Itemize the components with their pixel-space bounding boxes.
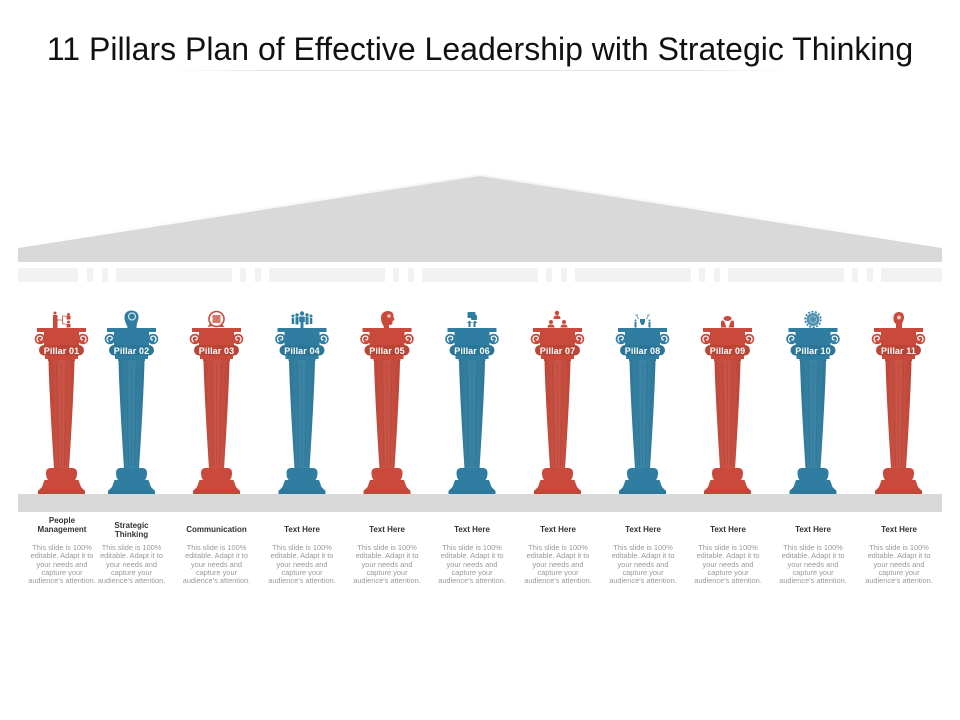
text block 9: Text Here	[710, 525, 746, 534]
text block 8	[609, 525, 677, 585]
pillar 05	[360, 311, 414, 494]
text block 2: your needs and	[106, 560, 157, 569]
text block 8: your needs and	[618, 560, 668, 569]
text block 1: People	[49, 516, 76, 525]
text block 2: audience's attention.	[98, 576, 165, 585]
text block 7: your needs and	[533, 560, 583, 569]
text block 5: audience's attention.	[353, 576, 421, 585]
text block 5: Text Here	[369, 525, 405, 534]
text block 5	[353, 525, 421, 585]
title underline	[170, 70, 790, 71]
text block 7: editable. Adapt it to	[527, 551, 589, 560]
text block 6: This slide is 100%	[442, 543, 502, 552]
text block 11: capture your	[878, 568, 920, 577]
text block 10: This slide is 100%	[783, 543, 843, 552]
text block 10: editable. Adapt it to	[782, 551, 844, 560]
text block 11: This slide is 100%	[869, 543, 929, 552]
text block 1: Management	[38, 525, 87, 534]
pillar 01: Pillar 01	[44, 346, 79, 356]
pillar 09	[701, 316, 754, 494]
text block 7: capture your	[537, 568, 579, 577]
pillar 06	[445, 312, 499, 494]
text block 2: This slide is 100%	[102, 543, 162, 552]
pillar 08: Pillar 08	[625, 346, 660, 356]
pillar 04	[275, 311, 329, 494]
pillar 11	[872, 312, 925, 494]
icon: head with gear	[124, 310, 138, 328]
pillar 10: Pillar 10	[795, 346, 831, 356]
text block 7: audience's attention.	[524, 576, 592, 585]
text block 9: This slide is 100%	[698, 543, 758, 552]
pillar 01	[35, 312, 88, 494]
text block 10	[779, 525, 847, 585]
text block 3: editable. Adapt it to	[185, 551, 248, 560]
text block 4	[268, 525, 336, 585]
text block 9: capture your	[707, 568, 749, 577]
base platform	[18, 494, 942, 512]
text block 3: audience's attention.	[183, 576, 250, 585]
text block 2: Strategic	[114, 521, 149, 530]
text block 3: This slide is 100%	[187, 543, 247, 552]
text block 8: editable. Adapt it to	[612, 551, 674, 560]
text block 1: editable. Adapt it to	[31, 551, 93, 560]
text block 2	[98, 521, 165, 585]
text block 3: Communication	[186, 525, 247, 534]
text block 6: editable. Adapt it to	[441, 551, 503, 560]
pillar 04: Pillar 04	[284, 346, 320, 356]
text block 3: your needs and	[191, 560, 242, 569]
pillar 02	[105, 310, 158, 494]
pillar 06: Pillar 06	[454, 346, 490, 356]
text block 1: audience's attention.	[28, 576, 96, 585]
text block 4: editable. Adapt it to	[271, 551, 333, 560]
text block 6: audience's attention.	[438, 576, 506, 585]
text block 11	[865, 525, 933, 585]
text block 7: This slide is 100%	[528, 543, 588, 552]
text block 4: Text Here	[284, 525, 320, 534]
pillar 05: Pillar 05	[369, 346, 405, 356]
text block 9: audience's attention.	[694, 576, 762, 585]
text block 8: audience's attention.	[609, 576, 677, 585]
pillar 07	[531, 311, 584, 494]
text block 11: your needs and	[874, 560, 924, 569]
text block 9: your needs and	[703, 560, 753, 569]
icon: head with cog	[381, 311, 394, 328]
text block 1	[28, 516, 96, 585]
icon: team of people	[292, 311, 312, 328]
pillar 08	[616, 315, 669, 494]
text block 10: capture your	[792, 568, 834, 577]
text block 1: This slide is 100%	[32, 543, 92, 552]
text block 4: your needs and	[277, 560, 327, 569]
pillar 02: Pillar 02	[114, 346, 149, 356]
icon: three people network	[548, 311, 568, 328]
pillar 03	[190, 312, 243, 494]
text block 5: your needs and	[362, 560, 412, 569]
text block 3	[183, 525, 250, 585]
pillar 10	[786, 312, 840, 494]
text block 2: capture your	[111, 568, 153, 577]
icon: lightbulb and people	[634, 315, 650, 328]
text block 10: audience's attention.	[779, 576, 847, 585]
frieze	[18, 268, 942, 282]
pillar 11: Pillar 11	[881, 346, 916, 356]
text block 11: audience's attention.	[865, 576, 933, 585]
text block 6	[438, 525, 506, 585]
text block 11: editable. Adapt it to	[868, 551, 930, 560]
text block 5: capture your	[366, 568, 408, 577]
icon: cog network	[805, 312, 821, 327]
pillar 09: Pillar 09	[710, 346, 745, 356]
text block 9	[694, 525, 762, 585]
text block 7: Text Here	[540, 525, 576, 534]
text block 4: This slide is 100%	[272, 543, 332, 552]
text block 7	[524, 525, 592, 585]
text block 10: your needs and	[788, 560, 838, 569]
text block 1: your needs and	[37, 560, 87, 569]
roof highlight	[18, 174, 942, 248]
text block 6: capture your	[451, 568, 493, 577]
pillar 07: Pillar 07	[540, 346, 575, 356]
text block 8: Text Here	[625, 525, 661, 534]
icon: group	[721, 316, 734, 328]
text block 6: Text Here	[454, 525, 490, 534]
text block 4: audience's attention.	[268, 576, 336, 585]
title: 11 Pillars Plan of Effective Leadership with Strategic Thinking	[47, 31, 913, 67]
text block 9: editable. Adapt it to	[697, 551, 759, 560]
icon: manager with org chart	[53, 312, 70, 328]
text block 10: Text Here	[795, 525, 831, 534]
roof pediment	[18, 176, 942, 262]
icon: head with idea	[894, 312, 904, 328]
text block 5: editable. Adapt it to	[356, 551, 418, 560]
text block 2: editable. Adapt it to	[100, 551, 163, 560]
text block 3: capture your	[196, 568, 238, 577]
text block 1: capture your	[41, 568, 83, 577]
icon: speech bubble	[208, 312, 224, 327]
text block 11: Text Here	[881, 525, 917, 534]
icon: chat and arrows	[467, 312, 478, 327]
text block 6: your needs and	[447, 560, 497, 569]
text block 2: Thinking	[115, 530, 148, 539]
pillar 03: Pillar 03	[199, 346, 234, 356]
text block 8: capture your	[622, 568, 664, 577]
text block 4: capture your	[281, 568, 323, 577]
text block 8: This slide is 100%	[613, 543, 673, 552]
text block 5: This slide is 100%	[357, 543, 417, 552]
